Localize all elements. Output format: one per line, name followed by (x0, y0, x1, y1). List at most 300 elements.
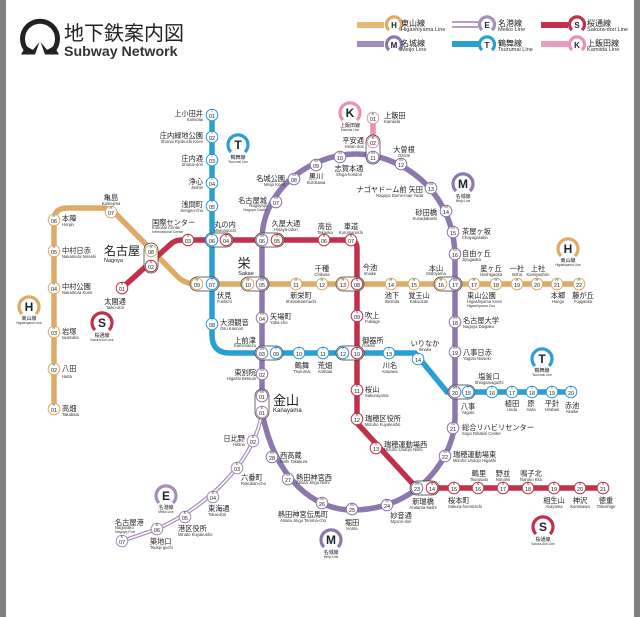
station H01: H (53, 402, 56, 407)
station H08 Nagoya (104, 243, 157, 264)
station H07: H (110, 205, 113, 210)
station S07: Kurumamichi (339, 230, 363, 235)
station T18 (526, 385, 538, 412)
station H07: Kamejima (102, 201, 121, 206)
line badge: Higashiyama west: 東山線 (21, 315, 37, 322)
line badge: Higashiyama east: 東山線 (560, 257, 576, 264)
station M16: M (453, 247, 457, 252)
station M27 (282, 472, 332, 485)
station H17 (467, 277, 503, 308)
station S20: 神沢 (573, 496, 587, 505)
station S12: 瑞穂区役所 (365, 414, 401, 423)
line badge: Meijo north: Meijo Line (456, 199, 470, 203)
station H03: H (53, 325, 56, 330)
station M20: 20 (452, 391, 458, 397)
station M09: 黒川 (309, 172, 323, 181)
station H06: Honjin (62, 222, 75, 227)
station T16: T (491, 385, 494, 390)
station H02: 02 (51, 368, 57, 374)
route: Meijo Line (262, 154, 455, 510)
station E03: Rokuban-cho (241, 481, 267, 486)
station S18: S (527, 481, 530, 486)
station E04: 東海通 (208, 504, 230, 513)
station T17: 17 (509, 391, 515, 397)
line badge: Kamiida: K (346, 106, 355, 120)
station E03: 03 (234, 467, 240, 473)
legend: Higashiyama Line: 東山線 (401, 18, 425, 28)
station S09: 吹上 (365, 311, 379, 320)
station H04: 中村公園 (62, 282, 91, 291)
station S05: Hisaya-odori (274, 227, 298, 232)
station T11: 11 (320, 352, 326, 358)
station S04 (214, 220, 236, 246)
station H01: 01 (51, 408, 57, 414)
station M25: Horita (346, 526, 358, 531)
station M24: 妙音通 (390, 511, 412, 520)
line badge: Sakura-dori south: Sakura-dori Line (531, 542, 555, 546)
station M22: Mizuho Undojo Higashi (453, 458, 496, 463)
line badge: Kamiida (340, 103, 360, 132)
station H06: 本陣 (62, 214, 76, 223)
station H19: 19 (514, 283, 520, 289)
station H02 (48, 362, 76, 379)
legend: Tsurumai Line: T (485, 41, 490, 50)
station T05 (180, 199, 218, 213)
station E04: Tokai-dori (208, 512, 226, 517)
route: Meiko Line (122, 412, 262, 541)
station S03: International Center (152, 230, 184, 234)
station M10: 10 (337, 156, 343, 162)
station M19 (449, 345, 492, 361)
station T13: T (388, 346, 391, 351)
station E07: 07 (119, 540, 125, 546)
station H10 Sakae: 10 (245, 283, 251, 289)
station T10 (293, 346, 311, 374)
station S02 (145, 259, 157, 272)
station H01 (48, 402, 80, 417)
station M07: Nagoyajo (249, 203, 268, 208)
station S08: 今池 (363, 263, 377, 272)
station K01: K (372, 111, 375, 116)
station T06 (206, 233, 218, 246)
station H09: 09 (194, 283, 200, 289)
station K01: 01 (370, 117, 376, 123)
line badge: Meijo north: M (458, 177, 468, 191)
station H11: 11 (293, 283, 299, 289)
station S12: Mizuho Kuyakusho (365, 422, 401, 427)
station H14: 14 (388, 283, 394, 289)
station S11 (351, 383, 389, 398)
station H08 Nagoya: H (150, 244, 153, 249)
station E02: 02 (250, 440, 256, 446)
station T14 (411, 339, 439, 365)
legend: Meijo Line: Meijo Line (401, 47, 426, 53)
station M28: 28 (269, 456, 275, 462)
station H19: Issha (512, 272, 523, 277)
station S05: S (276, 233, 279, 238)
station S01: 太閤通 (104, 297, 126, 306)
station M05: 05 (259, 283, 265, 289)
station H20 (526, 264, 550, 290)
station M02: 東別院 (234, 368, 256, 377)
station T10: 10 (296, 352, 302, 358)
station S19: Aioiyama (545, 504, 563, 509)
station E06: 築地口 (150, 537, 172, 546)
station S06: S (323, 233, 326, 238)
station H12 (314, 264, 330, 290)
station S18: Naruko Kita (520, 477, 543, 482)
station H04: H (53, 281, 56, 286)
station S07: S (350, 233, 353, 238)
station T19: T (551, 385, 554, 390)
line badge: Meijo south (321, 530, 341, 559)
station S15 (448, 481, 482, 509)
line badge: Sakura-dori south: 桜通線 (535, 536, 551, 543)
station M10: Shiga-hondori (336, 172, 362, 177)
station H04: 04 (51, 287, 57, 293)
station H11: 新栄町 (290, 291, 312, 300)
legend: Higashiyama Line: Higashiyama Line (401, 27, 445, 33)
station E06: Tsukiji-guchi (150, 545, 173, 550)
station S15: Sakura-hommachi (448, 504, 482, 509)
station T05: 浅間町 (181, 200, 203, 209)
station T03: 庄内通 (181, 154, 203, 163)
station T02: 庄内緑地公園 (160, 131, 203, 140)
station T13: 13 (386, 352, 392, 358)
station M08: 名城公園 (256, 174, 285, 183)
station M19: M (453, 345, 457, 350)
station S16: 16 (475, 487, 481, 493)
line badge: Meijo south: Meijo Line (324, 555, 338, 559)
station M13: ナゴヤドーム前 矢田 (357, 185, 423, 194)
station S21 (597, 481, 616, 509)
station S04: 丸の内 (214, 220, 236, 229)
station M16 (449, 247, 491, 262)
station S21: 徳重 (599, 496, 613, 505)
station M11: Heian-dori (345, 144, 364, 149)
station M28: 西高蔵 (280, 451, 302, 460)
station T12: 12 (340, 352, 346, 358)
station M21: M (451, 421, 455, 426)
station H11: H (295, 277, 298, 282)
station H15: 覚王山 (408, 291, 430, 300)
route: Kamiida Line (370, 118, 376, 142)
station S17: 野並 (496, 469, 510, 478)
station M07: Nagoya Castle (243, 208, 267, 212)
station E07: Nagoyako (115, 525, 135, 530)
station T05: Sengen-cho (180, 208, 204, 213)
station S03: 03 (185, 239, 191, 245)
station M27: Atsuta Jingu Nishi (296, 480, 330, 485)
station S15: 桜本町 (448, 496, 470, 505)
station M08: Meijo Koen (264, 182, 286, 187)
line badge: Higashiyama west (16, 297, 42, 325)
station T16: Shiogamaguchi (475, 380, 503, 385)
station S04: Marunouchi (214, 228, 236, 233)
station H05: 中村日赤 (62, 246, 91, 255)
legend: Kamiida Line: 上飯田線 (587, 38, 619, 48)
station M13: 13 (428, 187, 434, 193)
station H03: 岩塚 (62, 327, 76, 336)
station T09: 09 (273, 352, 279, 358)
station M19: 19 (452, 351, 458, 357)
station M24: M (385, 498, 389, 503)
station S17: 17 (500, 487, 506, 493)
station M27: 27 (285, 478, 291, 484)
station E07: E (121, 534, 124, 539)
station S14: S (431, 481, 434, 486)
station M24: 24 (384, 504, 390, 510)
station M26: 26 (319, 502, 325, 508)
station M18: 18 (452, 321, 458, 327)
station M03: 上前津 (234, 336, 256, 345)
station H04: Nakamura Koen (62, 290, 93, 295)
station E03: E (236, 461, 239, 466)
station T20: 赤池 (565, 401, 579, 410)
station M02 (227, 367, 268, 381)
station S08 (351, 263, 377, 290)
station T20 (565, 385, 579, 414)
station S11: S (356, 383, 359, 388)
station M06 (256, 233, 268, 246)
station S09 (351, 309, 381, 324)
station T06: 06 (209, 239, 215, 245)
station H16 (426, 264, 447, 290)
Kamiida stations (367, 111, 406, 148)
station H05: 05 (51, 250, 57, 256)
station M18: Nagoya Daigaku (463, 324, 495, 329)
line badge: Meijo south: 名城線 (323, 549, 339, 556)
legend: Tsurumai Line: 鶴舞線 (498, 38, 522, 48)
station H10 Sakae: Sakae (238, 271, 254, 277)
station T02: T (211, 130, 214, 135)
station S16: 鶴里 (472, 469, 486, 478)
station S12 (351, 412, 401, 427)
legend: Kamiida Line: K (574, 41, 580, 50)
station T16: 16 (489, 391, 495, 397)
station S05: 05 (274, 239, 280, 245)
line badge: Sakura-dori south: S (539, 520, 547, 534)
station H21: H (556, 277, 559, 282)
station K01 (367, 111, 406, 124)
line badge: Meijo north (453, 174, 473, 203)
Sakura-dori stations (104, 218, 616, 509)
station H13 (337, 277, 349, 290)
station T11: T (322, 346, 325, 351)
legend: Tsurumai Line (452, 37, 533, 53)
station M18 (449, 315, 499, 329)
station T13: 川名 (383, 361, 397, 370)
station E07 (115, 518, 145, 547)
station T07: T (211, 277, 214, 282)
station M17: 17 (452, 283, 458, 289)
station H07: 亀島 (104, 193, 118, 202)
station S14 (426, 481, 438, 494)
station S04: 04 (223, 239, 229, 245)
legend: Meiko Line: E (484, 21, 490, 30)
station M12 (393, 145, 415, 170)
line badge: Kamiida: 上飯田線 (340, 122, 360, 129)
station T02: Shonai Ryokuchi Koen (161, 139, 204, 144)
station T04 (189, 176, 218, 190)
station E01 Kanayama: Kanayama (273, 408, 302, 414)
station M04 (256, 311, 292, 325)
station H16: 本山 (429, 264, 443, 273)
station T18: T (531, 385, 534, 390)
station H18: 18 (493, 283, 499, 289)
station H17: Higashiyama Zoo (467, 304, 495, 308)
station E02: E (252, 434, 255, 439)
station H09 (191, 277, 203, 290)
route: Higashiyama Line (54, 208, 579, 409)
line badge: Higashiyama west: H (25, 300, 33, 314)
station T17 (505, 385, 519, 412)
station M07: 名古屋城 (238, 196, 267, 205)
station M17: M (453, 277, 457, 282)
station S19: S (553, 481, 556, 486)
station H20: 20 (534, 283, 540, 289)
legend: Meiko Line: Meiko Line (498, 27, 525, 33)
station T18: Hara (526, 407, 536, 412)
line badge: Sakura-dori west: Sakura-dori Line (90, 338, 114, 342)
station H03 (48, 325, 79, 340)
station T08: 08 (209, 323, 215, 329)
station E05: 05 (182, 516, 188, 522)
title: 地下鉄案内図 (64, 22, 184, 45)
station H13: 13 (340, 283, 346, 289)
station M09: M (314, 158, 318, 163)
station E05: Minato Kuyakusho (178, 532, 213, 537)
station E07: Nagoya Port (115, 530, 135, 534)
station M21: 21 (450, 427, 456, 433)
station M01 (256, 389, 268, 402)
station H10 Sakae: 栄 (237, 256, 251, 271)
line badge: Tsurumai east (532, 349, 552, 377)
station H04 (48, 281, 93, 295)
station H16: 16 (438, 283, 444, 289)
station S16 (470, 469, 489, 494)
station H12: H (321, 277, 324, 282)
station H21 (551, 277, 565, 304)
station M03: Kamimaezu (234, 343, 257, 348)
station M19: 八事日赤 (463, 348, 492, 357)
station M23 (409, 481, 437, 510)
line badge: Tsurumai east: T (538, 352, 546, 366)
line badge: Meiko: E (162, 489, 170, 503)
station T08: 大須観音 (220, 318, 249, 327)
station S01: S (121, 281, 124, 286)
station H15: H (413, 277, 416, 282)
station T18: 原 (527, 399, 535, 408)
station T09: T (275, 346, 278, 351)
station S13: 瑞穂運動場西 (384, 440, 427, 449)
station S10: 10 (354, 352, 360, 358)
station S04: S (225, 233, 228, 238)
legend: Sakura-dori Line: S (574, 21, 580, 30)
station T17: Ueda (507, 407, 518, 412)
line badge: Meiko (156, 486, 176, 514)
station S20 (570, 481, 590, 509)
line badge: Tsurumai north: T (234, 138, 242, 152)
legend: Meijo Line: 名城線 (401, 38, 425, 48)
station T15: 八事 (461, 402, 475, 411)
station M22: M (443, 449, 447, 454)
station S07: 車道 (344, 222, 358, 231)
station M28 (266, 450, 308, 464)
station E05 (178, 510, 213, 537)
station S01: Taiko-dori (106, 305, 124, 310)
station T07: Fushimi (217, 299, 232, 304)
station T16: 塩釜口 (478, 372, 500, 381)
station S03: Kokusai Center (152, 225, 181, 230)
station T08: Osu Kannon (220, 326, 244, 331)
station S07 (339, 222, 363, 246)
station S09: S (356, 309, 359, 314)
station M04: 04 (259, 317, 265, 323)
station H14: H (390, 277, 393, 282)
line badge: Meiko: Meiko Line (158, 510, 174, 514)
station T11: Arahata (318, 369, 333, 374)
station M19: Yagoto Nisseki (463, 356, 491, 361)
Meijo stations (227, 136, 534, 531)
title: Subway Network (64, 44, 178, 60)
line badge: Higashiyama west: Higashiyama Line (16, 321, 42, 325)
station M16: 自由ヶ丘 (462, 249, 491, 258)
station S06: 06 (321, 239, 327, 245)
route: Tsurumai Line (212, 115, 571, 392)
line badge: Tsurumai north: 鶴舞線 (230, 154, 246, 161)
station K01: 上飯田 (384, 111, 406, 120)
station M04: Yaba-cho (270, 320, 288, 325)
station M20 (449, 385, 461, 398)
station M26 (278, 496, 328, 523)
station M15: Chayagasaka (462, 235, 488, 240)
station M22 (439, 449, 496, 463)
station H20: Kamiyashiro (526, 272, 550, 277)
station M07: M (274, 195, 278, 200)
station H18: Hoshigaoka (480, 272, 503, 277)
station T14: T (417, 352, 420, 357)
station T02: 02 (209, 136, 215, 142)
station M23: M (415, 481, 419, 486)
station S06 (317, 222, 333, 246)
station M14: M (444, 204, 448, 209)
station T03: T (211, 153, 214, 158)
station M04: M (260, 311, 264, 316)
station M03 (234, 336, 268, 359)
station M21: Sogo Rihabiri Center (462, 431, 501, 436)
legend: Sakura-dori Line: Sakura-dori Line (587, 27, 628, 33)
station T19 (545, 385, 559, 412)
station E07: 名古屋港 (115, 518, 145, 527)
station H19 (510, 264, 524, 290)
station T04: 浄心 (189, 177, 204, 186)
station T04: T (211, 176, 214, 181)
line badge: Sakura-dori west (90, 313, 114, 342)
station S20: 20 (577, 487, 583, 493)
station S15: S (453, 481, 456, 486)
station T03: Shonai-dori (182, 162, 203, 167)
station H14 (385, 277, 400, 304)
station H03: 03 (51, 331, 57, 337)
station S19 (543, 481, 565, 509)
station E06 (150, 522, 173, 550)
station T17: 植田 (505, 399, 519, 408)
station S02: S (150, 259, 153, 264)
station S05: 久屋大通 (272, 219, 300, 228)
station E04 (207, 490, 230, 517)
station M03: M (260, 346, 264, 351)
